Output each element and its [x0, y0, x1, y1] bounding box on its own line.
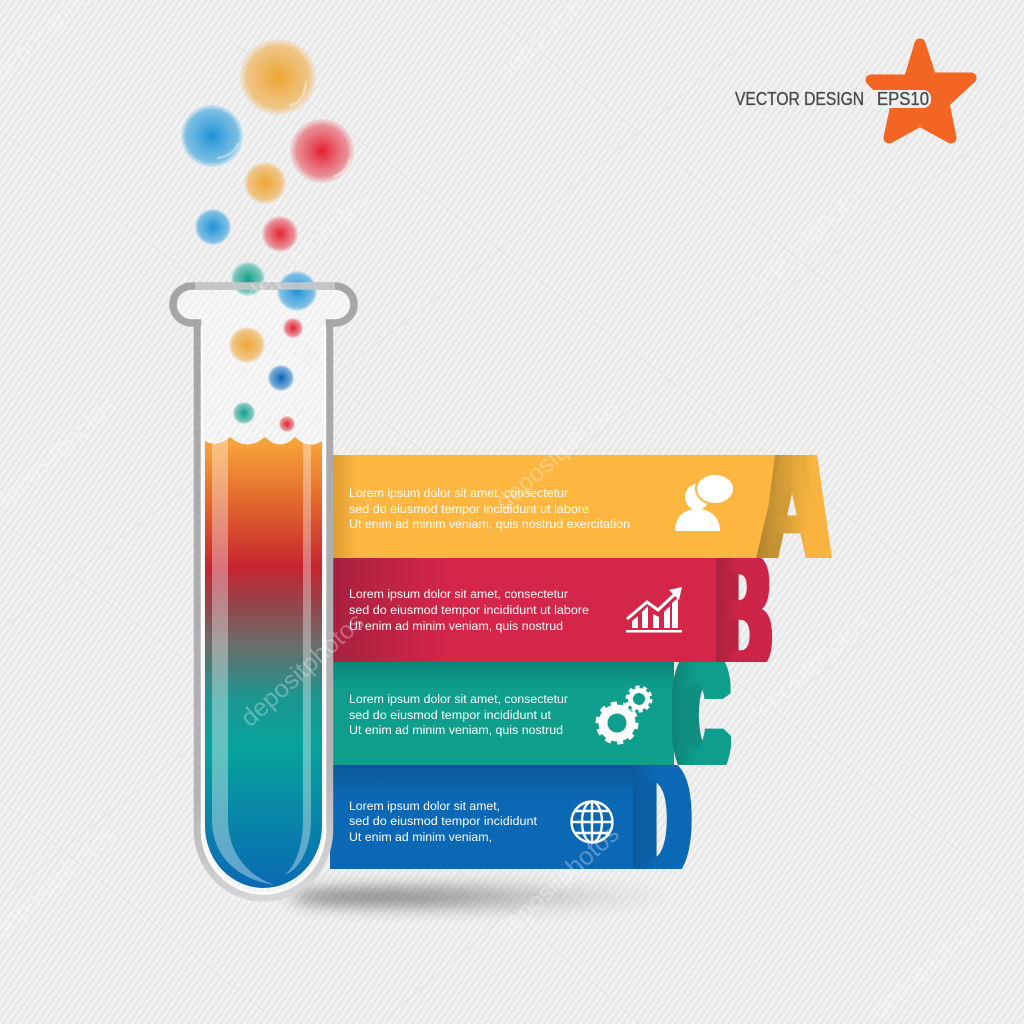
band D text: sed do eiusmod tempor incididunt [349, 814, 538, 828]
inner rim highlight [202, 326, 325, 893]
band C [333, 662, 732, 765]
vector design label: VECTOR DESIGN [735, 89, 864, 109]
text: B [717, 520, 769, 704]
icon: people chat [675, 474, 734, 531]
band A text: Lorem ipsum dolor sit amet, consectetur [349, 486, 568, 500]
band A text [349, 486, 630, 531]
band B text: Ut enim ad minim veniam, quis nostrud [349, 619, 563, 633]
icon: gears [598, 688, 650, 742]
watermarks: depositphotos [740, 607, 875, 732]
label cutout [872, 90, 931, 108]
watermarks: depositphotos [490, 819, 625, 944]
right highlight [285, 440, 311, 875]
watermarks: depositphotos [865, 899, 1000, 1024]
band D background [330, 765, 635, 869]
rim over bubbles [195, 282, 335, 290]
band C text: Ut enim ad minim veniam, quis nostrud [349, 723, 563, 737]
band D [330, 765, 692, 869]
band C text: Lorem ipsum dolor sit amet, consectetur [349, 692, 568, 706]
ground shadow [290, 886, 670, 908]
band D text: Lorem ipsum dolor sit amet, [349, 799, 500, 813]
liquid [205, 437, 322, 888]
band C text [349, 692, 568, 737]
watermarks: depositphotos [240, 184, 375, 309]
band D text [349, 799, 538, 844]
text: C [678, 623, 724, 807]
band C text: sed do eiusmod tempor incididunt ut [349, 708, 552, 722]
band A background [330, 455, 776, 558]
band C background [330, 662, 674, 765]
band B text [349, 587, 589, 633]
star badge [735, 44, 971, 138]
letter A: A [758, 426, 826, 589]
icon: globe [571, 801, 613, 843]
watermarks: depositphotos [740, 175, 875, 300]
eps10 label: EPS10 [877, 89, 929, 109]
watermarks: depositphotos [490, 391, 625, 516]
band A text: Ut enim ad minim veniam, quis nostrud exercitation [349, 517, 630, 531]
band B text: Lorem ipsum dolor sit amet, consectetur [349, 587, 568, 601]
watermarks: depositphotos [235, 607, 370, 732]
band B [333, 558, 772, 662]
left highlight [212, 438, 275, 885]
text: D [634, 725, 688, 915]
tube glass fill [177, 286, 350, 898]
band D text: Ut enim ad minim veniam, [349, 830, 492, 844]
test tube [173, 286, 354, 898]
bubbles [181, 39, 354, 432]
icon: growth chart [626, 587, 682, 632]
band B text: sed do eiusmod tempor incididunt ut labore [349, 603, 589, 617]
band B background [330, 558, 718, 662]
band A [333, 455, 832, 558]
fold tab A [762, 455, 832, 558]
tube outline [173, 286, 354, 898]
star [871, 44, 971, 138]
band A text: sed do eiusmod tempor incididunt ut labore [349, 502, 589, 516]
